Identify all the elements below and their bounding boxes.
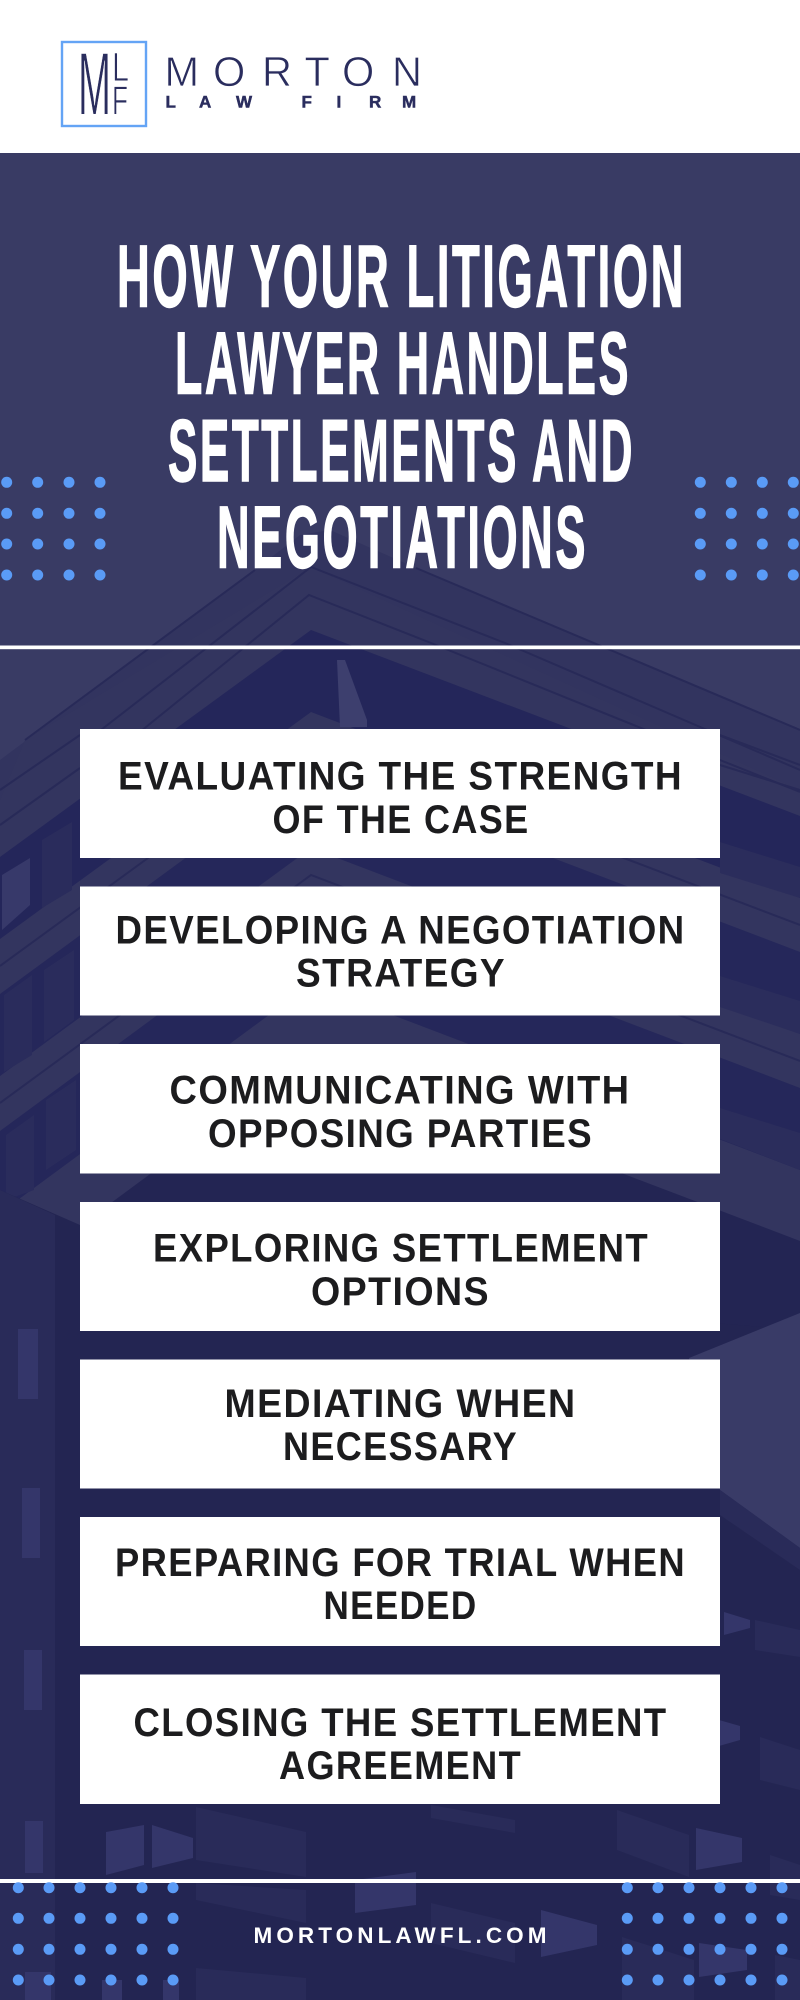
- logo: Morton Law Firm: [62, 34, 422, 134]
- footer website url: MORTONLAWFL.COM: [254, 1923, 546, 1948]
- card: evaluating the strength of the case: [80, 729, 720, 858]
- card: closing the settlement agreement: [80, 1674, 720, 1804]
- card: mediating when necessary: [80, 1360, 720, 1488]
- card: closing the settlement agreement: AGREEMENT: [279, 1744, 522, 1788]
- card: evaluating the strength of the case: OF THE CASE: [272, 798, 530, 842]
- logo monogram: [78, 34, 129, 134]
- card: preparing for trial when needed: PREPARING FOR TRIAL WHEN: [115, 1541, 686, 1585]
- logo tagline: LAW FIRM: [166, 93, 416, 112]
- dots: bottom left: [13, 1882, 178, 1986]
- logo monogram: M: [78, 34, 111, 134]
- card: developing a negotiation strategy: STRATEGY: [296, 952, 506, 996]
- card: communicating with opposing parties: [80, 1044, 720, 1174]
- logo monogram: L: [112, 44, 129, 90]
- header: white logo band: [0, 0, 800, 153]
- logo wordmark: MORTON: [164, 48, 422, 95]
- top divider line: [0, 646, 800, 649]
- card: closing the settlement agreement: CLOSING THE SETTLEMENT: [134, 1701, 668, 1745]
- background: lower building bricks and windows: [0, 1190, 800, 2000]
- title: [117, 226, 686, 586]
- card: evaluating the strength of the case: EVALUATING THE STRENGTH: [118, 754, 683, 798]
- card: mediating when necessary: NECESSARY: [283, 1425, 518, 1469]
- dots: top right: [695, 477, 799, 580]
- bottom divider line: [0, 1879, 800, 1883]
- card: communicating with opposing parties: COMMUNICATING WITH: [170, 1068, 630, 1112]
- dots: bottom right: [622, 1882, 788, 1986]
- logo frame: [62, 42, 146, 126]
- card: exploring settlement options: OPTIONS: [311, 1270, 490, 1314]
- card: exploring settlement options: [80, 1202, 720, 1331]
- card: mediating when necessary: MEDIATING WHEN: [224, 1382, 576, 1426]
- card: preparing for trial when needed: NEEDED: [324, 1584, 478, 1628]
- card: developing a negotiation strategy: DEVELOPING A NEGOTIATION: [116, 908, 686, 952]
- card: developing a negotiation strategy: [80, 886, 720, 1016]
- card: preparing for trial when needed: [80, 1517, 720, 1646]
- dots: top left: [1, 477, 106, 580]
- card: exploring settlement options: EXPLORING SETTLEMENT: [153, 1226, 649, 1270]
- logo monogram: F: [112, 78, 128, 124]
- card: communicating with opposing parties: OPPOSING PARTIES: [208, 1112, 593, 1156]
